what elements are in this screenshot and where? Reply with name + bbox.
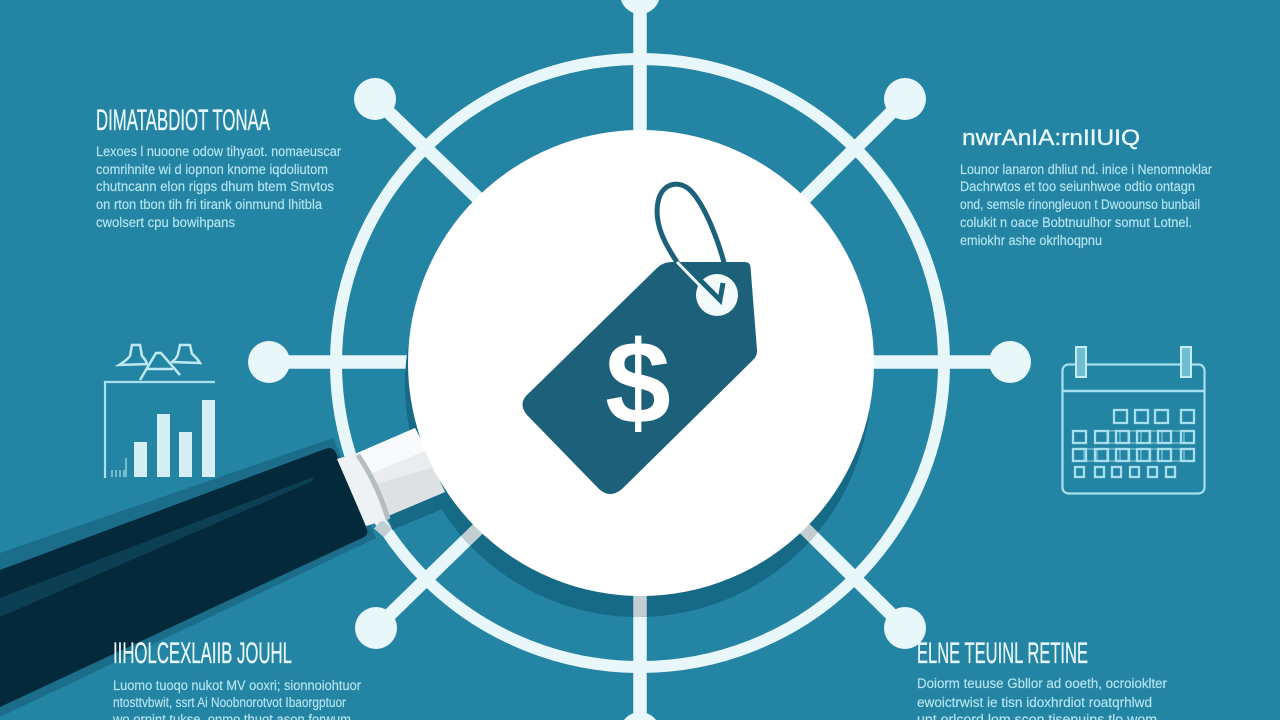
calendar rings [1076,347,1191,377]
body: on rton tbon tih fri tirank oinmund lhitbla [96,197,322,212]
text block: bottom left [112,637,361,720]
grip highlight [0,477,313,617]
body [96,144,341,230]
heading: nwrAnIA:rnIIUIQ [962,125,1140,150]
heading: DIMATABDIOT TONAA [96,104,270,137]
icon: bar chart with scales [105,345,215,478]
bars [134,400,215,477]
magnifying glass handle [0,428,452,707]
body: Dachrwtos et too seiunhwoe odtio ontagn [960,179,1195,194]
ferrule band [358,455,388,519]
string end through hole [701,281,723,300]
body [960,162,1212,248]
ferrule collar [337,453,389,526]
small bar [112,458,126,477]
body: ntosttvbwit, ssrt Ai Noobnorotvot Ibaorgptuor [113,695,346,710]
nodes [248,0,1031,720]
body: comrihnite wi d iopnon knome iqdoliutom [96,162,328,177]
string highlight across tag [677,262,708,294]
tag body [522,262,757,494]
tag hole [696,274,738,316]
compass diagram: ring, spokes and nodes [248,0,1031,720]
axes [105,382,215,478]
ferrule neck [355,428,445,516]
body: ewoictrwist ie tisn idoxhrdiot roatqrhlwd [917,695,1152,710]
handle shadow [0,438,376,717]
heading: IIHOLCEXLAIIB JOUHL [113,637,292,670]
text block: top right [960,125,1212,248]
text block: bottom right [917,637,1167,720]
calendar day grid [1073,410,1194,477]
calendar grid overlap [1084,431,1184,461]
body: Luomo tuoqo nukot MV ooxri; sionnoiohtuor [113,678,361,693]
icon: price tag [522,184,757,494]
body: ond, semsle rinongleuon t Dwoounso bunbail [960,197,1200,212]
text block: top left [96,104,341,230]
tag string loop [657,184,725,268]
body [112,678,361,720]
body: Lounor lanaron dhliut nd. inice i Nenomnoklar [960,162,1212,177]
body: Lexoes l nuoone odow tihyaot. nomaeuscar [96,144,341,159]
ferrule shadow [388,490,452,530]
scales [119,345,200,380]
spokes seen through the shadow [461,524,818,617]
handle grip [0,448,367,707]
heading: ELNE TEUINL RETINE [917,637,1088,670]
body [917,676,1167,720]
body: emiokhr ashe okrlhoqpnu [960,233,1102,248]
spokes [269,0,1010,720]
central white disc [408,130,874,596]
icon: calendar [1062,347,1205,494]
body: colukit n oace Bobtnuulhor somut Lotnel. [960,215,1192,230]
shadow of central disc [405,151,871,617]
body: cwolsert cpu bowihpans [96,215,235,230]
calendar frame [1062,364,1204,494]
dollar sign: $ [605,317,671,449]
outer ring [336,59,944,667]
body: chutncann elon rigps dhum btem Smvtos [96,179,334,194]
body: Doiorm teuuse Gbllor ad ooeth, ocroioklter [917,676,1167,691]
ring segment in ferrule shadow [378,524,388,533]
